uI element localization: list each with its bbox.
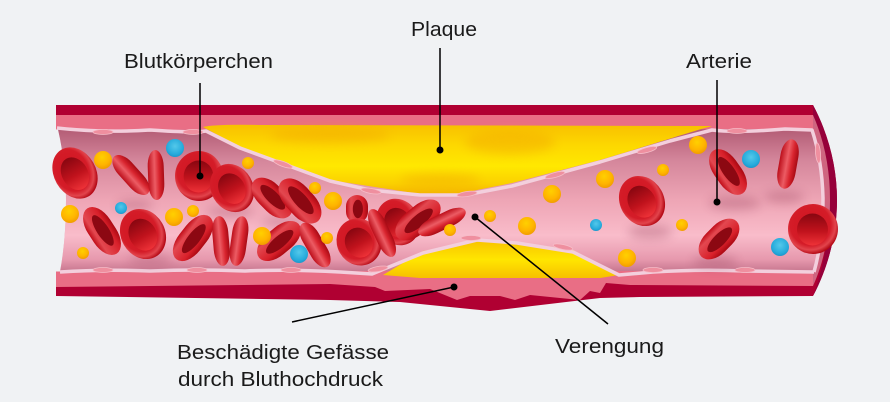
label: Arterie: Arterie — [686, 51, 752, 73]
label: Blutkörperchen: Blutkörperchen — [124, 51, 273, 73]
yellow particles — [61, 136, 707, 267]
blue particles — [115, 139, 789, 263]
right inner cap — [813, 115, 830, 286]
left opening — [55, 130, 66, 272]
leader: Arterie — [714, 80, 720, 206]
label: damaged vessels: durch Bluthochdruck — [178, 369, 384, 391]
plaque shading — [270, 127, 555, 186]
label: damaged vessels — [177, 342, 389, 391]
upper plaque — [203, 125, 712, 194]
cell shadows — [117, 191, 804, 268]
vessel membrane — [57, 128, 823, 275]
membrane nuclei — [93, 128, 821, 273]
leader: Verengung — [472, 214, 608, 324]
red blood cells — [43, 138, 838, 274]
leader: damaged vessels — [292, 284, 458, 322]
leader: Blutkörperchen — [196, 83, 204, 180]
lower plaque — [383, 241, 619, 278]
artery — [55, 105, 837, 311]
pink wall band with damage — [56, 115, 813, 300]
leader: Plaque — [436, 48, 444, 154]
label: damaged vessels: Beschädigte Gefässe — [177, 342, 389, 364]
label: Plaque: Plaque — [411, 19, 477, 41]
lumen — [58, 129, 822, 271]
outer wall — [56, 105, 837, 311]
right rim — [813, 105, 837, 296]
label: Verengung: Verengung — [555, 336, 664, 358]
